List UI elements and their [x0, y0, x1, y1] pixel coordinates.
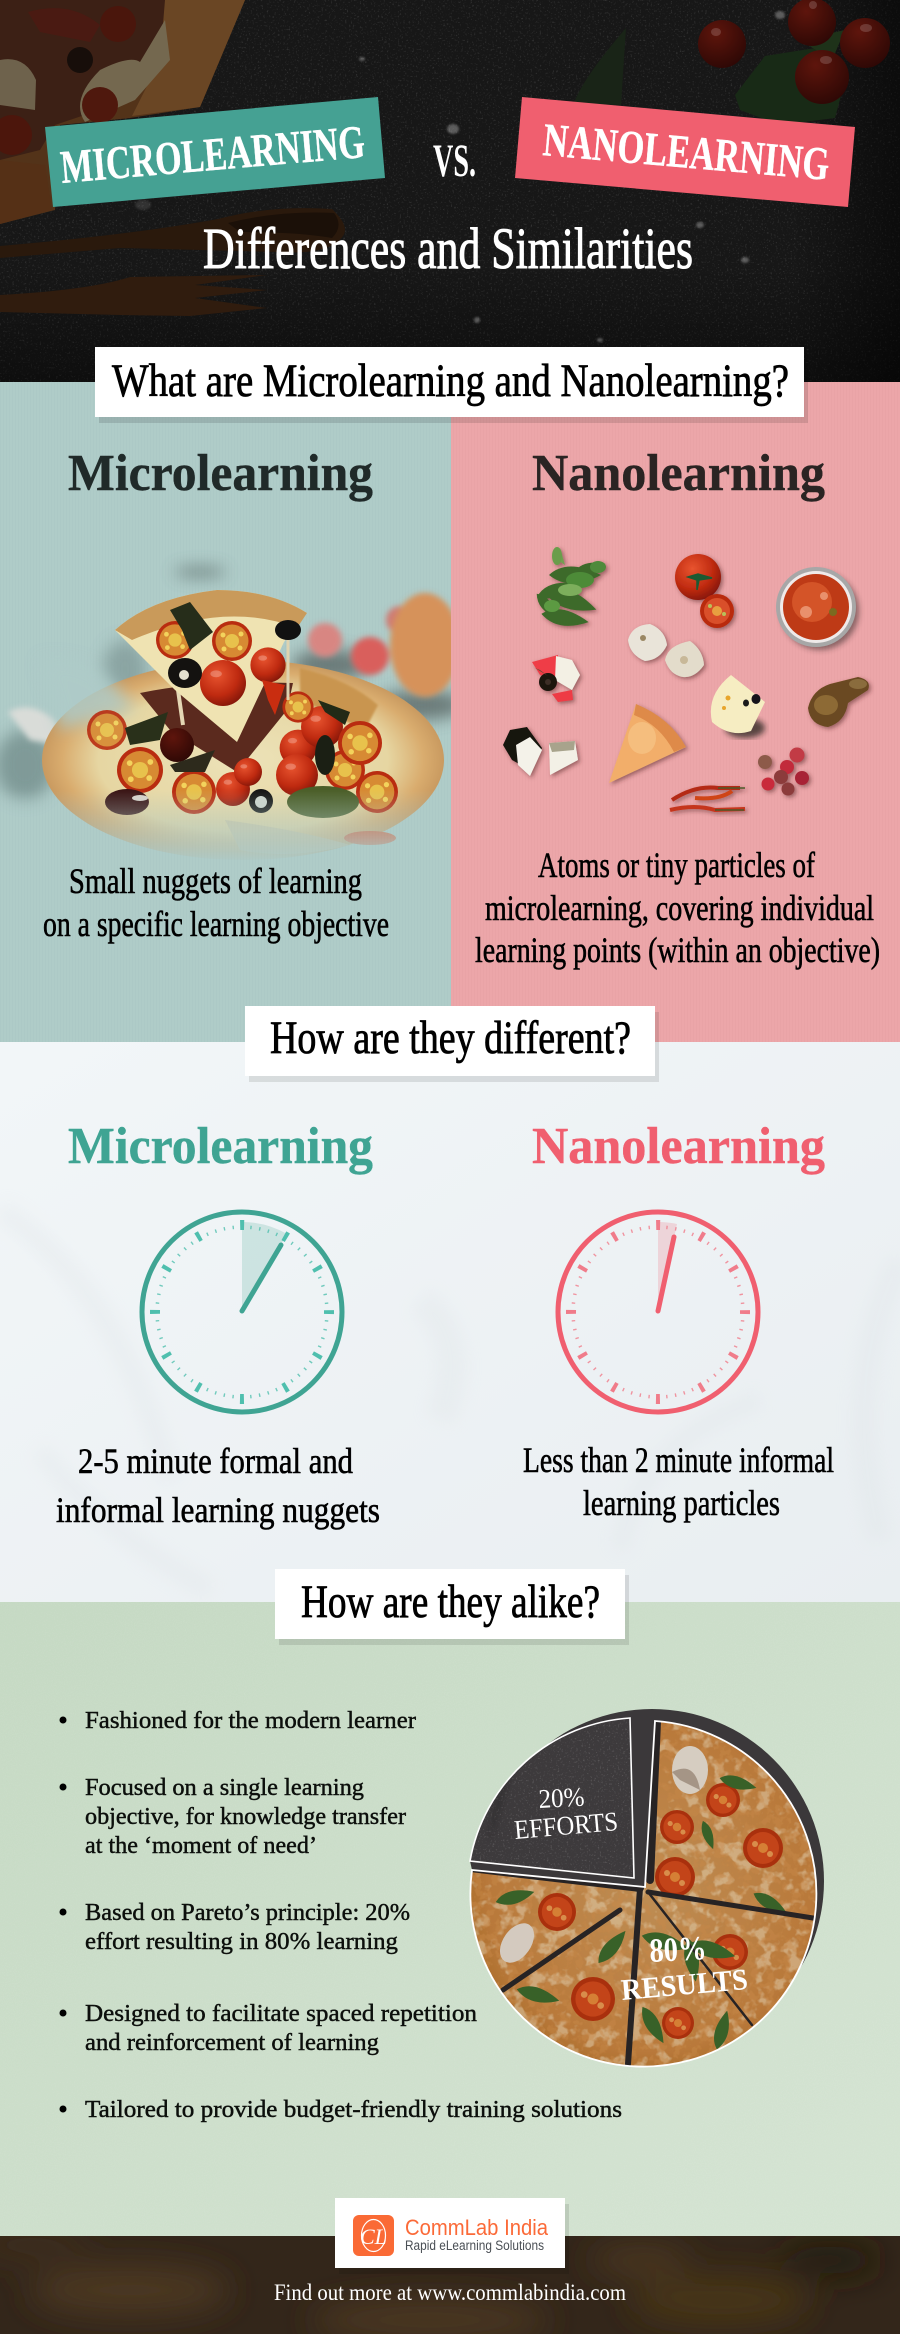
list of similarities: Tailored to provide budget-friendly training solutions: [85, 2097, 622, 2123]
list of similarities: [60, 1708, 622, 2123]
outlines: [470, 1718, 816, 2067]
logo: commlab india: [335, 2198, 569, 2274]
panel: how they are alike: [0, 1602, 900, 2236]
list of similarities: Focused on a single learning: [85, 1775, 364, 1801]
caption: microlearning duration: informal learning nuggets: [56, 1490, 380, 1530]
image: wooden spoon: [0, 208, 345, 258]
list of similarities: Based on Pareto’s principle: 20%: [85, 1900, 410, 1926]
icon: pizza slice: [609, 704, 686, 783]
label: 20 percent efforts: 20%: [538, 1782, 585, 1814]
list of similarities: Designed to facilitate spaced repetition: [85, 2001, 477, 2027]
footer link text: Find out more at www.commlabindia.com: [274, 2280, 626, 2305]
header background: [0, 0, 900, 382]
heading: how are they different: [245, 1006, 659, 1082]
list of similarities: at the ‘moment of need’: [85, 1833, 317, 1859]
logo: commlab india: CommLab India: [405, 2215, 549, 2240]
caption: nanolearning: Atoms or tiny particles of: [538, 845, 815, 885]
label: 80 percent results: 80%: [648, 1930, 707, 1970]
caption: microlearning duration: [56, 1441, 380, 1530]
heading: what are microlearning and nanolearning: [95, 347, 808, 423]
list of similarities: and reinforcement of learning: [85, 2030, 379, 2056]
icon: onion bulb: [808, 677, 869, 727]
pie chart: 20 percent efforts, 80 percent results: [469, 1709, 824, 2068]
logo icon: [353, 2215, 394, 2256]
label: 20 percent efforts: [513, 1782, 619, 1845]
image: pizza in header corner: [0, 0, 245, 224]
subtitle: Differences and Similarities: [203, 216, 693, 281]
caption: microlearning: on a specific learning objective: [43, 904, 389, 944]
caption: nanolearning duration: learning particles: [583, 1483, 780, 1523]
caption: microlearning duration: 2-5 minute formal and: [78, 1441, 353, 1481]
image: pizza with lifted slice: [0, 567, 465, 860]
slice: 80 percent pizza: [471, 1722, 816, 2066]
title badge: microlearning: [45, 97, 385, 207]
icon: strawberry, olive and cheese: [532, 655, 580, 702]
icon: basil: [533, 547, 607, 630]
image: wooden fork: [0, 275, 267, 316]
pizza slice: [115, 590, 307, 742]
logo icon: CL: [360, 2224, 387, 2249]
label: 80 percent results: RESULTS: [620, 1963, 749, 2007]
image: cherry tomatoes and leaves: [574, 0, 890, 125]
heading: nanolearning: Nanolearning: [532, 1118, 825, 1175]
heading: how are they alike: [275, 1569, 629, 1645]
panel: how they differ: [0, 1042, 900, 1602]
slice: 20 percent dark: [471, 1720, 633, 1877]
footer band: [0, 2233, 900, 2334]
icon: sauce jar: [776, 567, 859, 650]
list of similarities: objective, for knowledge transfer: [85, 1804, 406, 1830]
label: 80 percent results: [620, 1930, 749, 2007]
icon: clock 2 to 5 minutes: [142, 1212, 342, 1412]
icon: tomatoes: [675, 554, 734, 628]
caption: nanolearning duration: [523, 1440, 834, 1523]
icon: mushrooms: [503, 727, 578, 776]
caption: microlearning: [43, 861, 389, 944]
icon: red berries: [758, 748, 809, 796]
icon: cheese wedge: [711, 675, 765, 738]
icon: clock under 2 minutes: [558, 1212, 758, 1412]
title: vs.: VS.: [433, 135, 476, 187]
list of similarities: effort resulting in 80% learning: [85, 1929, 398, 1955]
caption: nanolearning: [475, 845, 880, 970]
heading: microlearning: Microlearning: [68, 1118, 373, 1175]
logo: commlab india: Rapid eLearning Solutions: [405, 2238, 544, 2253]
heading: how are they different: How are they different?: [270, 1012, 631, 1064]
title badge: microlearning: MICROLEARNING: [58, 116, 367, 194]
panel: nanolearning definition: [451, 382, 900, 1042]
list of similarities: Fashioned for the modern learner: [85, 1708, 416, 1734]
caption: microlearning: Small nuggets of learning: [69, 861, 362, 901]
panel: microlearning definition: [0, 382, 465, 1042]
label: 20 percent efforts: EFFORTS: [513, 1806, 619, 1845]
icon: garlic: [628, 624, 704, 677]
heading: microlearning: Microlearning: [68, 445, 373, 502]
heading: how are they alike: How are they alike?: [301, 1576, 600, 1628]
title badge: nanolearning: [515, 97, 855, 207]
heading: nanolearning: Nanolearning: [532, 445, 825, 502]
icon: red chilies: [670, 788, 745, 810]
